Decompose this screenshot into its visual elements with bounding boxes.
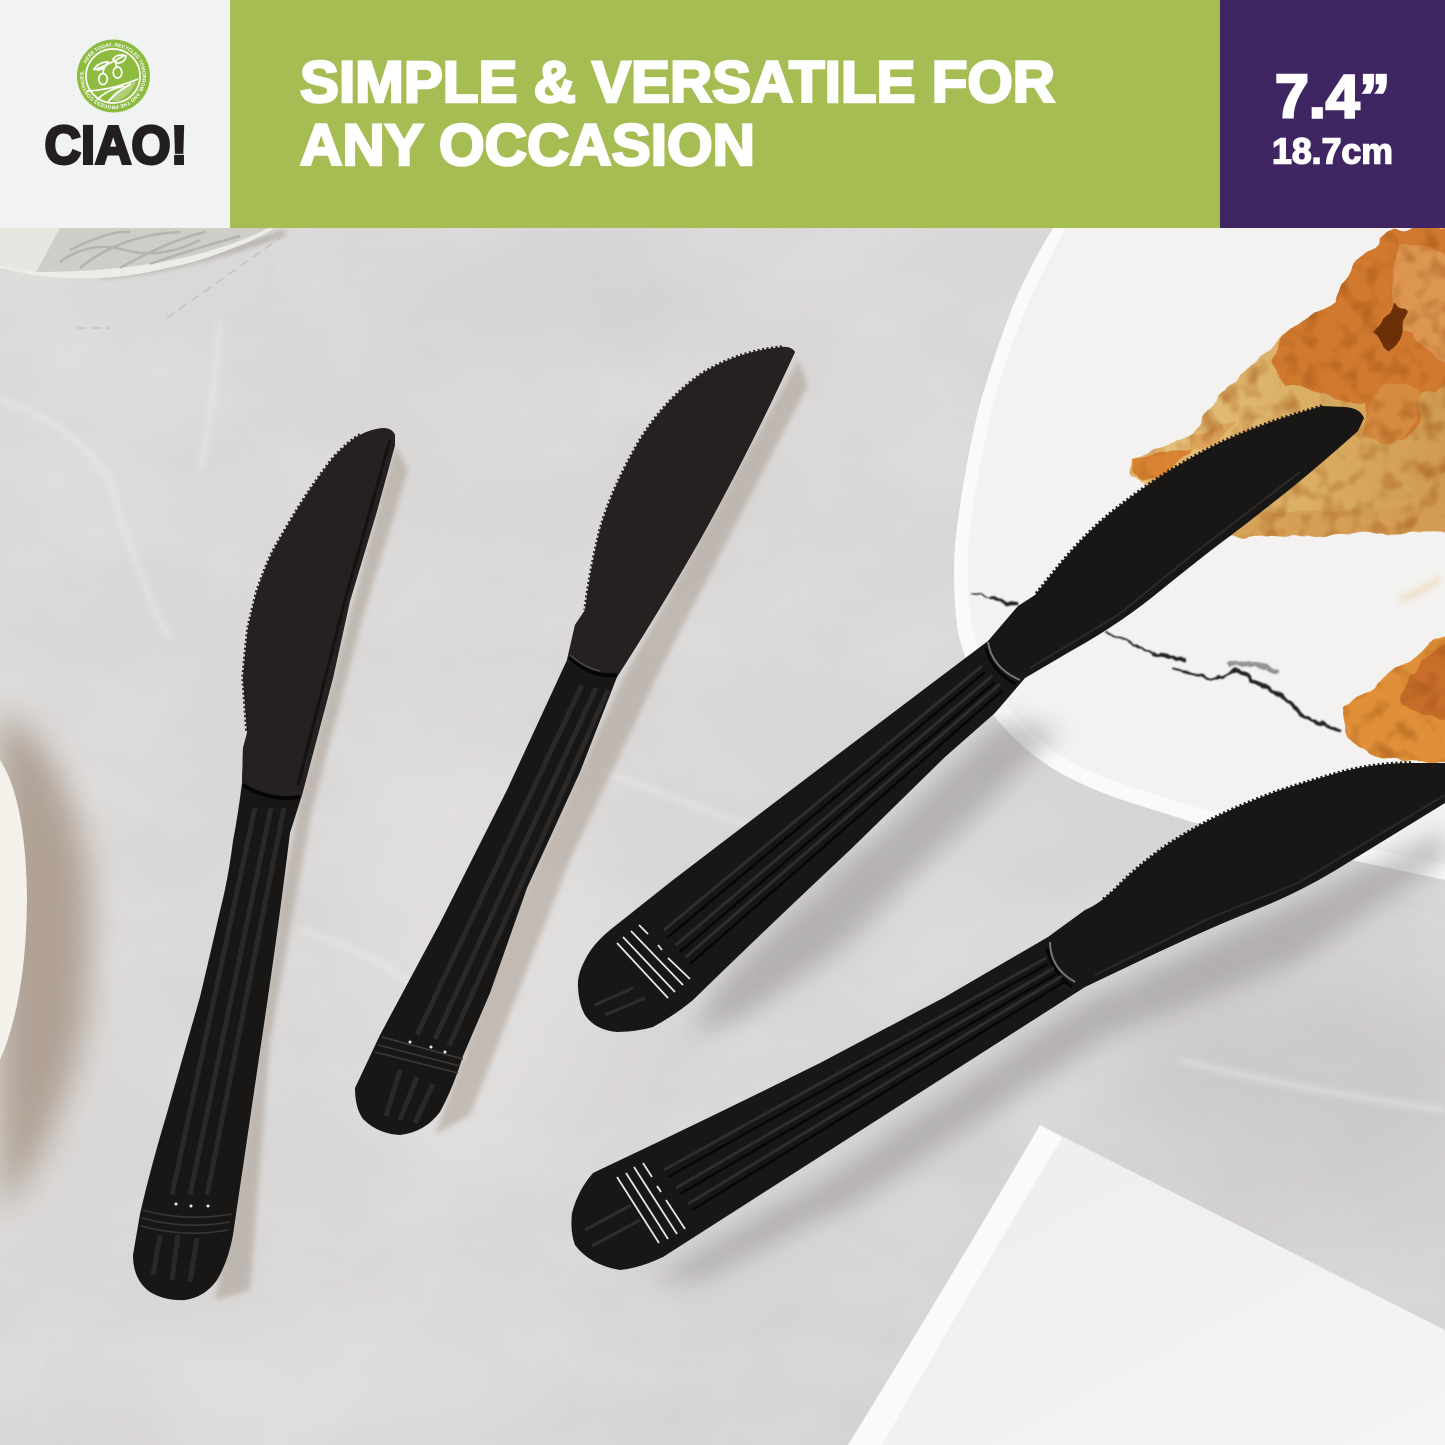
icon: olive branch recycling badge: HERE TODAY, RECYCLED TOMORROW, AND THE PROCESS CONTINUES. xyxy=(80,43,146,109)
bolster xyxy=(988,642,1020,680)
title xyxy=(300,50,1055,178)
ribs xyxy=(153,808,284,1282)
napkin xyxy=(848,1125,1445,1445)
ribs xyxy=(386,685,608,1123)
ribs xyxy=(668,964,1064,1210)
cross lines xyxy=(617,1163,685,1243)
knife 4 xyxy=(571,763,1445,1270)
title: SIMPLE & VERSATILE FOR xyxy=(300,50,1055,115)
logo wordmark: CIAO! xyxy=(44,116,188,176)
blade xyxy=(567,347,795,677)
blade spine xyxy=(298,440,390,785)
top-left plate edge xyxy=(0,228,285,278)
plate veins xyxy=(972,593,1342,732)
knife 1 xyxy=(133,428,408,1300)
knife 2 xyxy=(355,347,808,1135)
header: logo panel xyxy=(0,0,230,228)
size in inches: 7.4” xyxy=(1275,62,1390,130)
white marks xyxy=(408,1040,446,1054)
blade edge xyxy=(1095,795,1445,975)
cross lines xyxy=(617,925,690,998)
knife 4 shadow xyxy=(650,830,1445,1280)
blade edge xyxy=(1030,472,1300,668)
size in centimetres: 18.7cm xyxy=(1272,130,1393,172)
serrated edge xyxy=(1035,406,1322,595)
bolster xyxy=(243,785,300,798)
header: size panel xyxy=(1220,0,1445,228)
knife 3 xyxy=(578,406,1364,1032)
lower slice xyxy=(1343,630,1445,764)
white marble plate xyxy=(954,228,1445,880)
left bowl with shadow xyxy=(0,712,90,1210)
knife 3 shadow xyxy=(690,720,1060,1035)
title: ANY OCCASION xyxy=(300,113,755,178)
bolster xyxy=(569,657,617,675)
blade xyxy=(242,428,395,797)
ribs xyxy=(668,672,1003,964)
serrated edge xyxy=(1102,763,1411,900)
bolster xyxy=(1050,942,1075,982)
serrated edge xyxy=(585,347,782,610)
white marks xyxy=(174,1202,210,1208)
pizza slice, upper xyxy=(1130,228,1445,764)
header: title panel xyxy=(230,0,1220,228)
serrated edge xyxy=(243,435,360,733)
